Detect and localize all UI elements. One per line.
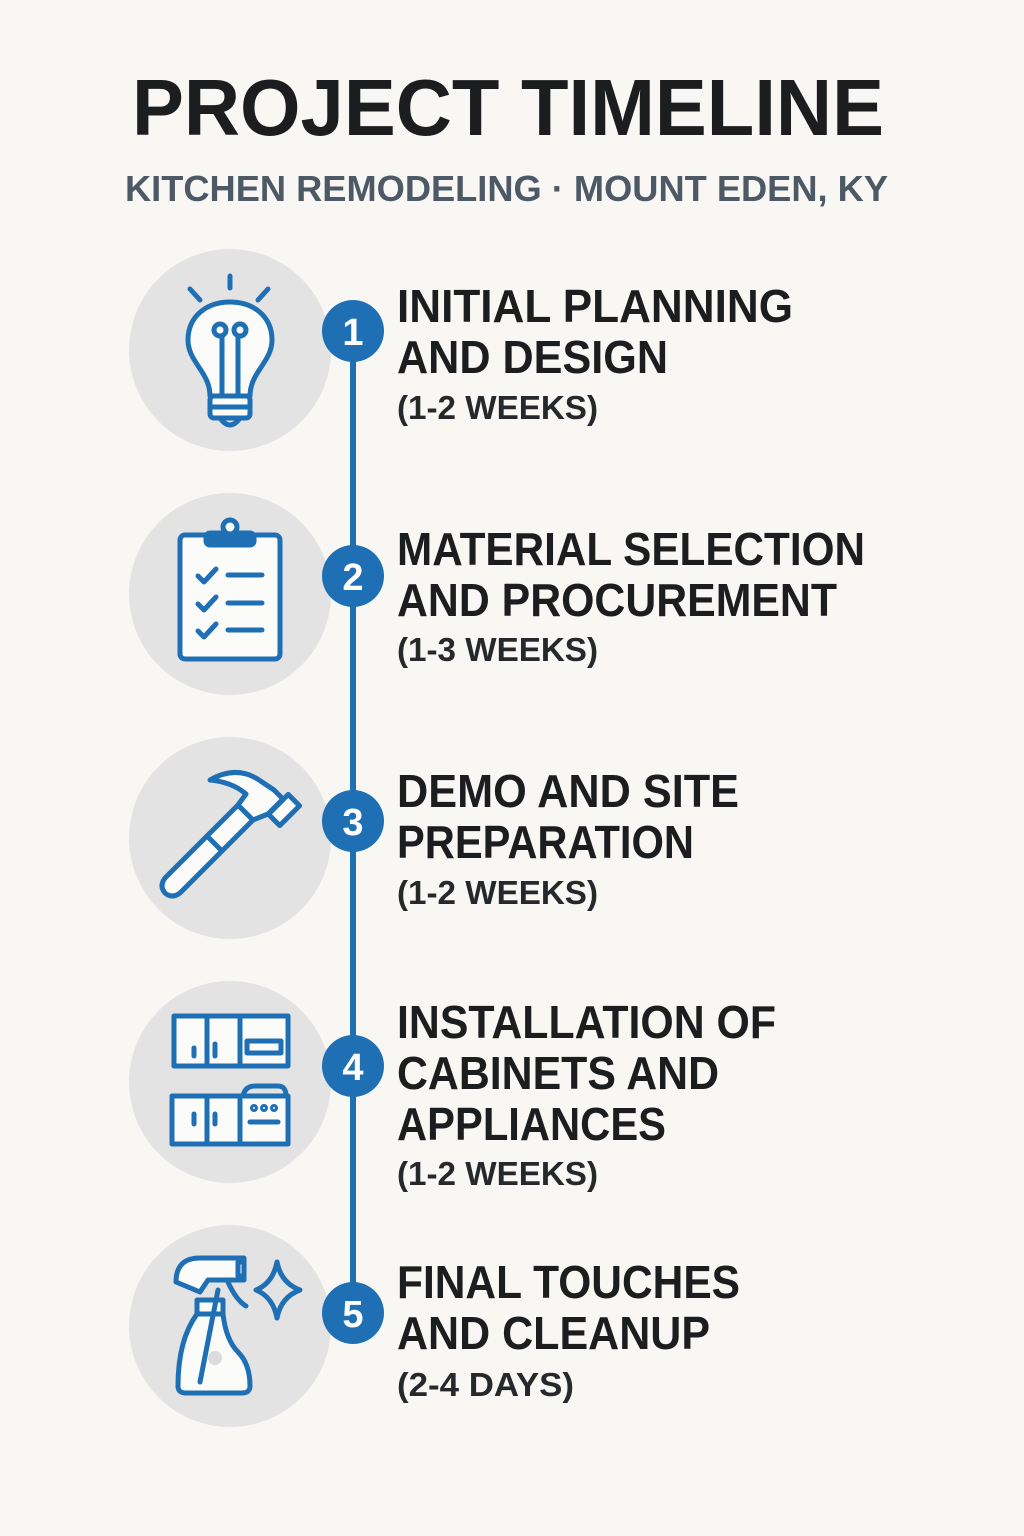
heading 3: DEMO AND SITE xyxy=(397,765,739,817)
heading 3: PREPARATION xyxy=(397,816,694,868)
heading 4: INSTALLATION OF xyxy=(397,996,776,1048)
heading 5: FINAL TOUCHES xyxy=(397,1256,740,1308)
timeline line xyxy=(350,331,356,1313)
heading 4: CABINETS AND xyxy=(397,1047,719,1099)
heading 4: (1-2 WEEKS) xyxy=(397,1155,598,1192)
heading 2: MATERIAL SELECTION xyxy=(397,523,865,575)
heading 1: AND DESIGN xyxy=(397,331,668,383)
step 2 xyxy=(129,493,865,695)
heading 4 xyxy=(397,996,776,1192)
heading 1: (1-2 WEEKS) xyxy=(397,389,598,426)
step 3 xyxy=(129,737,739,939)
step 3: 3 xyxy=(342,802,364,844)
step 5 xyxy=(129,1225,740,1427)
number badge 4 xyxy=(322,1035,384,1097)
number badge 3 xyxy=(322,790,384,852)
step 5: 5 xyxy=(342,1294,364,1336)
heading 3 xyxy=(397,765,739,911)
icon: spray bottle xyxy=(129,1225,331,1427)
heading 3: (1-2 WEEKS) xyxy=(397,874,598,911)
icon: hammer xyxy=(129,737,331,939)
step 4 xyxy=(129,981,776,1192)
step 1 xyxy=(129,249,793,451)
step 2: 2 xyxy=(342,557,364,599)
number badge 1 xyxy=(322,300,384,362)
heading 2: AND PROCUREMENT xyxy=(397,574,837,626)
number badge 5 xyxy=(322,1282,384,1344)
heading 5: (2-4 DAYS) xyxy=(397,1366,574,1403)
heading 5 xyxy=(397,1256,740,1403)
subtitle: KITCHEN REMODELING · MOUNT EDEN, KY xyxy=(125,168,888,209)
title: PROJECT TIMELINE xyxy=(132,63,884,152)
icon: cabinets xyxy=(129,981,331,1183)
heading 5: AND CLEANUP xyxy=(397,1307,710,1359)
icon: clipboard xyxy=(129,493,331,695)
heading 2 xyxy=(397,523,865,668)
step 4: 4 xyxy=(342,1047,364,1089)
heading 1: INITIAL PLANNING xyxy=(397,280,793,332)
heading 4: APPLIANCES xyxy=(397,1098,666,1150)
icon: lightbulb xyxy=(129,249,331,451)
number badge 2 xyxy=(322,545,384,607)
heading 2: (1-3 WEEKS) xyxy=(397,631,598,668)
heading 1 xyxy=(397,280,793,426)
step 1: 1 xyxy=(342,312,364,354)
